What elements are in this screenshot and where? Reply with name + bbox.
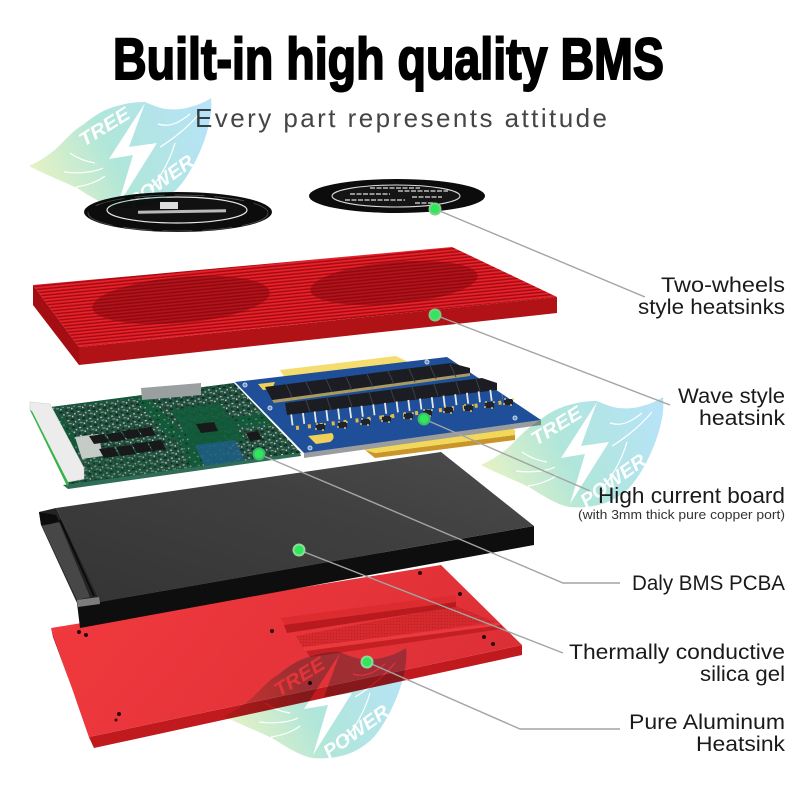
label: high current board: [578, 483, 785, 522]
mosfet row one: [265, 363, 470, 403]
raised bar one: [280, 595, 456, 633]
subtitle: Every part represents attitude: [195, 103, 607, 133]
mounting holes: [243, 360, 517, 450]
back copper tab: [280, 356, 408, 378]
small components: [316, 399, 513, 430]
shadow between raised bars: [296, 606, 495, 648]
raised bar two: [303, 623, 502, 657]
watermark leaf: bottom center: TREE: [271, 653, 330, 701]
part: two-wheels heatsink right disc: [309, 179, 485, 213]
label: thermally conductive silica gel: silica gel: [700, 663, 785, 686]
part: black silica gel case: [39, 452, 534, 628]
board edge: [304, 420, 541, 458]
label: two-wheels heatsinks: Two-wheels: [661, 274, 785, 297]
label: two-wheels heatsinks: style heatsinks: [638, 296, 785, 319]
label: thermally conductive silica gel: [569, 641, 785, 686]
gold pads: [258, 382, 334, 444]
label: wave style heatsink: [678, 385, 786, 430]
mosfet leads: [291, 394, 502, 420]
label: pure aluminum heatsink: Pure Aluminum: [629, 711, 785, 734]
watermark leaf: middle right: POWER: [577, 450, 651, 512]
watermark leaf: top left: POWER: [125, 151, 199, 213]
part: red aluminum heatsink: [51, 565, 522, 748]
part: wave style heatsink: [33, 247, 557, 365]
label: Daly BMS PCBA: Daly BMS PCBA: [632, 572, 785, 595]
watermark leaf: bottom center: [224, 648, 406, 763]
PCBA white connector: [30, 402, 84, 482]
mosfet gold feet: [296, 402, 506, 428]
front copper tab surface: [354, 423, 515, 453]
label: pure aluminum heatsink: Heatsink: [696, 733, 786, 756]
plate holes: [77, 571, 495, 722]
part: high current board: [235, 356, 541, 458]
leader lines: [259, 209, 670, 729]
watermark leaf: top left: TREE: [76, 103, 135, 151]
label: wave style heatsink: Wave style: [678, 385, 785, 408]
watermark leaf: middle right: TREE: [528, 402, 587, 450]
front copper tab gold edge: [365, 435, 515, 458]
label: thermally conductive silica gel: Thermally conductive: [569, 641, 785, 664]
watermark leaf: bottom center: POWER: [320, 701, 394, 763]
label: two-wheels heatsinks: [638, 274, 785, 319]
label: pure aluminum heatsink: [629, 711, 786, 756]
blue board surface: [235, 357, 541, 453]
label: wave style heatsink: heatsink: [699, 407, 786, 430]
PCBA top connector: [141, 383, 201, 400]
mosfet row two: [285, 378, 497, 415]
power chips on PCBA: [89, 422, 262, 458]
part: two-wheels heatsink left disc: [84, 192, 272, 232]
part: green BMS PCBA: [51, 383, 310, 489]
label: high current board: High current board: [598, 483, 785, 508]
watermark leaf: middle right: [481, 397, 663, 512]
title: Built-in high quality BMS: [113, 27, 664, 92]
PCBA green edge: [30, 410, 69, 486]
watermark leaf: top left: [29, 98, 211, 213]
label: high current board: (with 3mm thick pure copper port): [578, 507, 785, 522]
green marker dots: [252, 202, 442, 668]
